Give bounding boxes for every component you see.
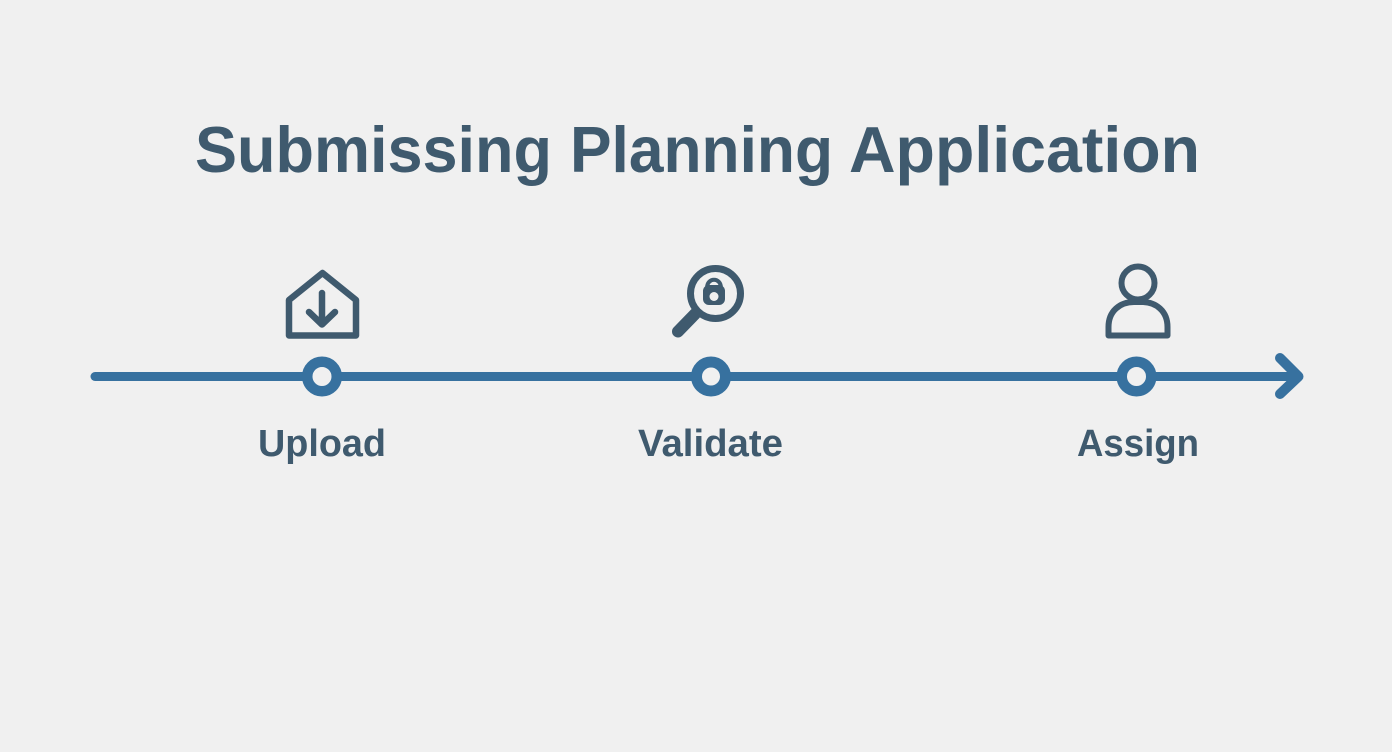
title: Submissing bbox=[195, 113, 552, 186]
step: upload bbox=[258, 273, 386, 465]
label: Validate bbox=[638, 423, 783, 465]
title: Planning bbox=[570, 113, 833, 186]
step: validate bbox=[638, 268, 783, 465]
icon: magnifier with padlock bbox=[678, 268, 740, 332]
step: assign bbox=[1077, 266, 1199, 465]
timeline arrow bbox=[95, 358, 1298, 394]
timeline node bbox=[307, 362, 337, 391]
timeline node bbox=[1122, 362, 1151, 391]
timeline node bbox=[696, 362, 726, 391]
icon: house with download arrow bbox=[289, 273, 356, 336]
icon: person bbox=[1108, 266, 1168, 336]
label: Assign bbox=[1077, 423, 1199, 465]
title: Application bbox=[849, 113, 1200, 186]
label: Upload bbox=[258, 423, 386, 465]
